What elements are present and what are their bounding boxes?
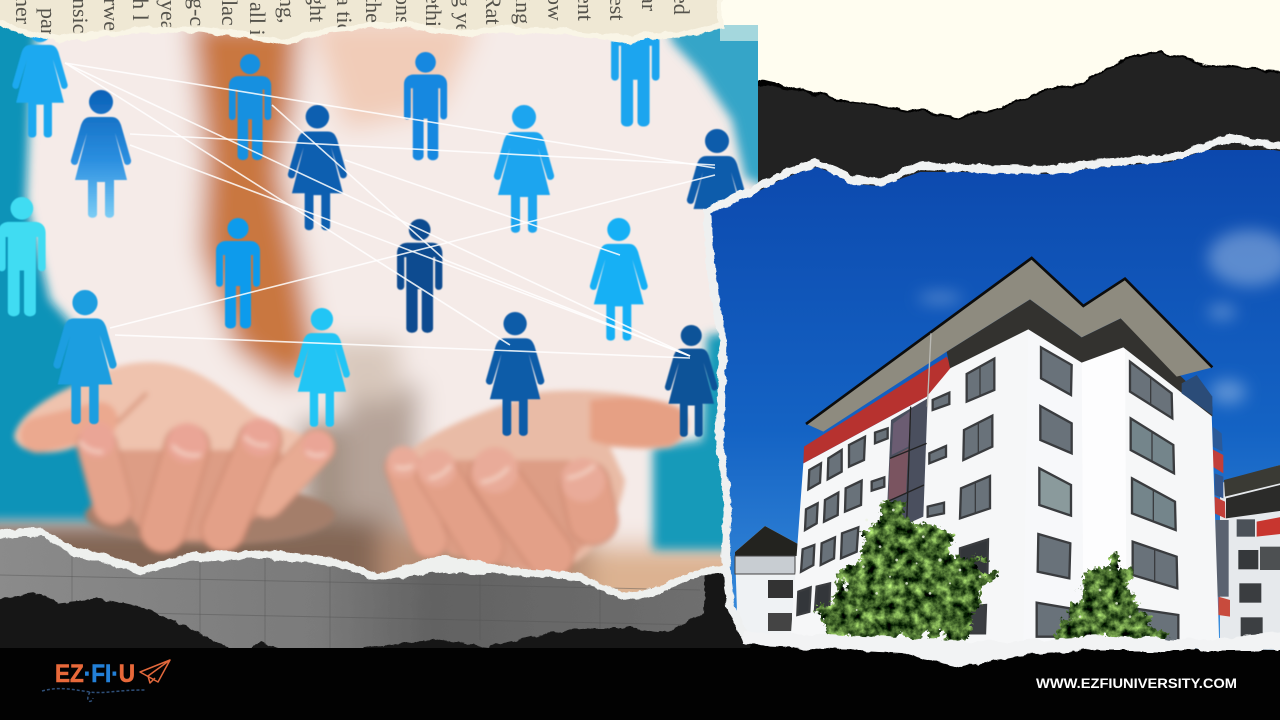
main building, drawn in a 3x working grid <box>790 258 1280 650</box>
newspaper text: lac <box>217 0 242 26</box>
pale teal strip, photo top right <box>720 25 758 41</box>
icon: person 5 <box>404 52 447 160</box>
dark torn band, top right <box>740 52 1280 240</box>
icon: person 10 <box>216 218 260 328</box>
glass railing, roof corner <box>1182 375 1212 415</box>
newspaper text <box>11 0 694 37</box>
newspaper text: par <box>36 8 61 37</box>
flagpole <box>927 333 931 407</box>
icon: person 1 <box>12 36 68 138</box>
icon: person 15 <box>486 312 544 436</box>
torn newspaper, top left <box>0 0 722 45</box>
torn white frame, top of the building photo <box>706 138 1280 212</box>
neighbouring building, left <box>735 526 798 640</box>
icon: person 11 <box>397 219 442 333</box>
balcony railing <box>947 299 1212 417</box>
icon: person 4 <box>288 105 347 230</box>
torn black paper, bottom left <box>0 565 750 680</box>
small tree <box>1050 558 1167 640</box>
large tree <box>822 502 993 640</box>
icon: person 3 <box>229 54 271 160</box>
icon: person 16 <box>665 325 718 437</box>
footer logo: EZ-FI-U <box>42 660 170 701</box>
website URL: WWW.EZFIUNIVERSITY.COM <box>1036 676 1237 691</box>
neighbouring building, right <box>1213 427 1280 650</box>
torn white edge, below the photo <box>0 528 735 600</box>
newspaper text: yea <box>156 0 181 31</box>
building facade <box>790 327 1219 647</box>
windows <box>797 347 1178 643</box>
torn white frame, left of the building photo <box>707 208 748 642</box>
dashed flight path <box>42 689 145 701</box>
people icons <box>0 5 747 437</box>
icon: person 7 <box>610 38 660 128</box>
icon: person 14 <box>294 308 350 427</box>
tall stairwell glazing <box>888 398 928 522</box>
icon: person 8 <box>686 128 745 210</box>
icon: person 13 <box>53 290 117 424</box>
black footer band <box>0 648 1280 720</box>
blue sky <box>700 150 1280 660</box>
icon: person 6 <box>494 105 554 233</box>
logo wordmark: EZ·FI·U <box>55 660 135 688</box>
left hand <box>14 362 335 545</box>
torn gray grid paper, below the photo <box>0 532 735 670</box>
clouds <box>918 230 1280 404</box>
icon: person 2 <box>71 90 131 218</box>
network connection lines <box>65 63 715 358</box>
icon: person 9 <box>0 197 46 316</box>
icon: person 12 <box>590 218 648 341</box>
photo: hands holding a network of people <box>0 25 758 593</box>
torn cream paper, top right <box>700 0 1280 118</box>
icon: paper plane <box>140 660 170 683</box>
photo: apartment building against blue sky <box>700 150 1280 660</box>
right hand <box>387 391 687 575</box>
blurred photo background <box>0 26 758 593</box>
newspaper text: all i <box>245 2 270 36</box>
red balcony row <box>803 357 952 463</box>
torn white edge, under the building <box>742 630 1280 668</box>
window mullions <box>975 367 1155 582</box>
flat roof <box>806 258 1212 432</box>
